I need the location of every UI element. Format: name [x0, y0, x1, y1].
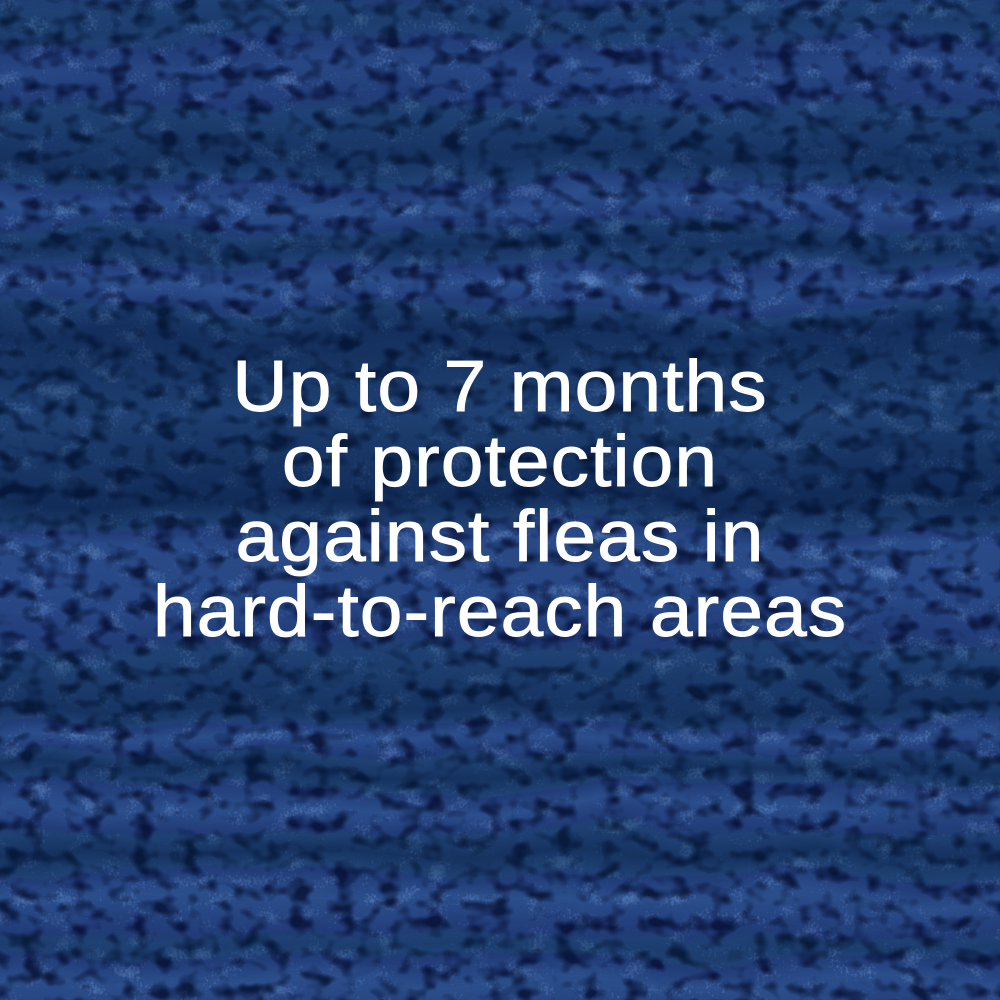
headline text [153, 347, 847, 652]
headline text: Up to 7 months [232, 347, 768, 427]
headline text: against fleas in [235, 497, 765, 577]
headline text: of protection [282, 422, 718, 502]
headline text: hard-to-reach areas [153, 572, 847, 652]
